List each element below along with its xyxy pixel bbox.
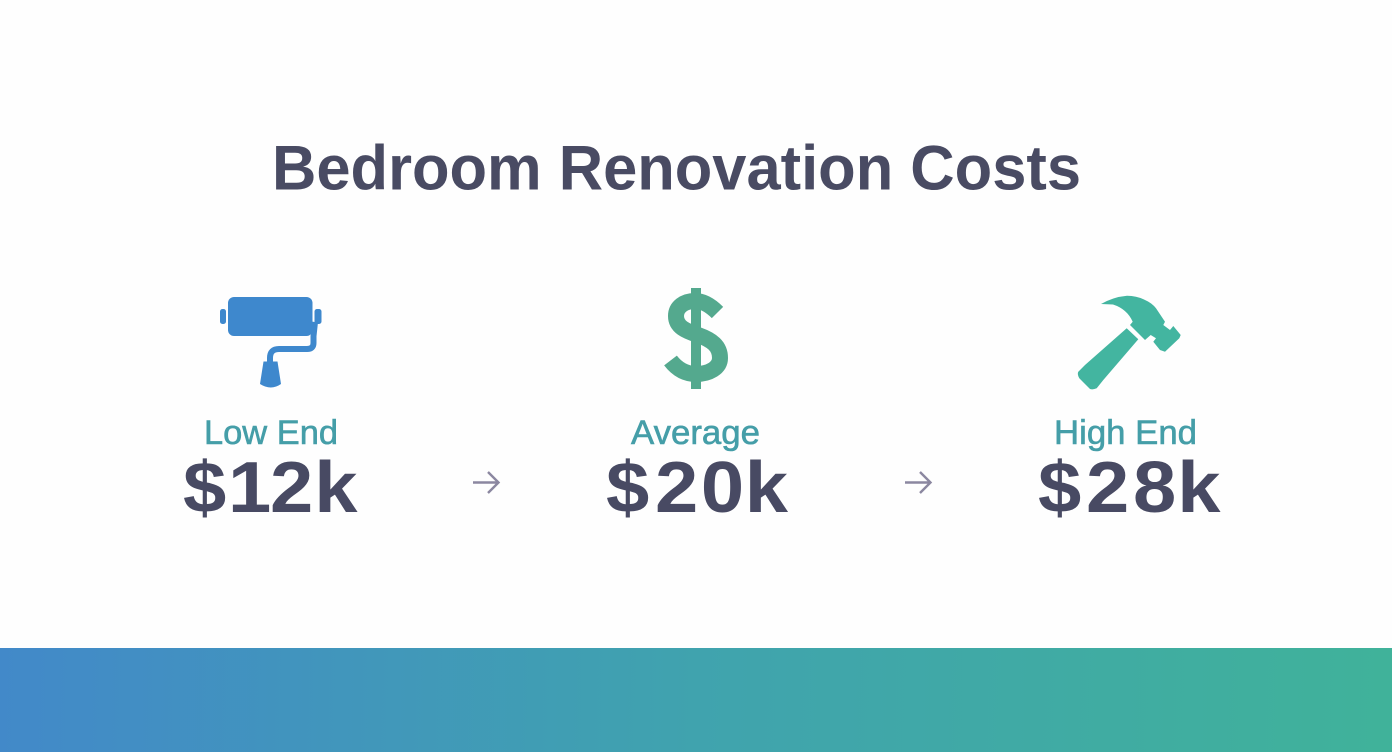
label: average: Average [631, 414, 760, 452]
icon: paint roller [220, 297, 322, 388]
icon: dollar sign [670, 288, 720, 389]
value: $28k: $28k [1038, 447, 1221, 527]
panel: high end [1038, 296, 1221, 527]
value: $20k: $20k [606, 447, 788, 527]
arrow: low to average [473, 472, 498, 493]
icon: hammer [1078, 296, 1181, 389]
panel: low end [183, 297, 358, 527]
label: low end: Low End [204, 414, 338, 452]
title: Bedroom Renovation Costs [272, 134, 1081, 204]
panel: average [606, 288, 788, 527]
value: $12k: $12k [183, 447, 358, 527]
footer gradient band [0, 648, 1392, 752]
label: high end: High End [1054, 414, 1197, 452]
arrow: average to high [905, 472, 930, 493]
